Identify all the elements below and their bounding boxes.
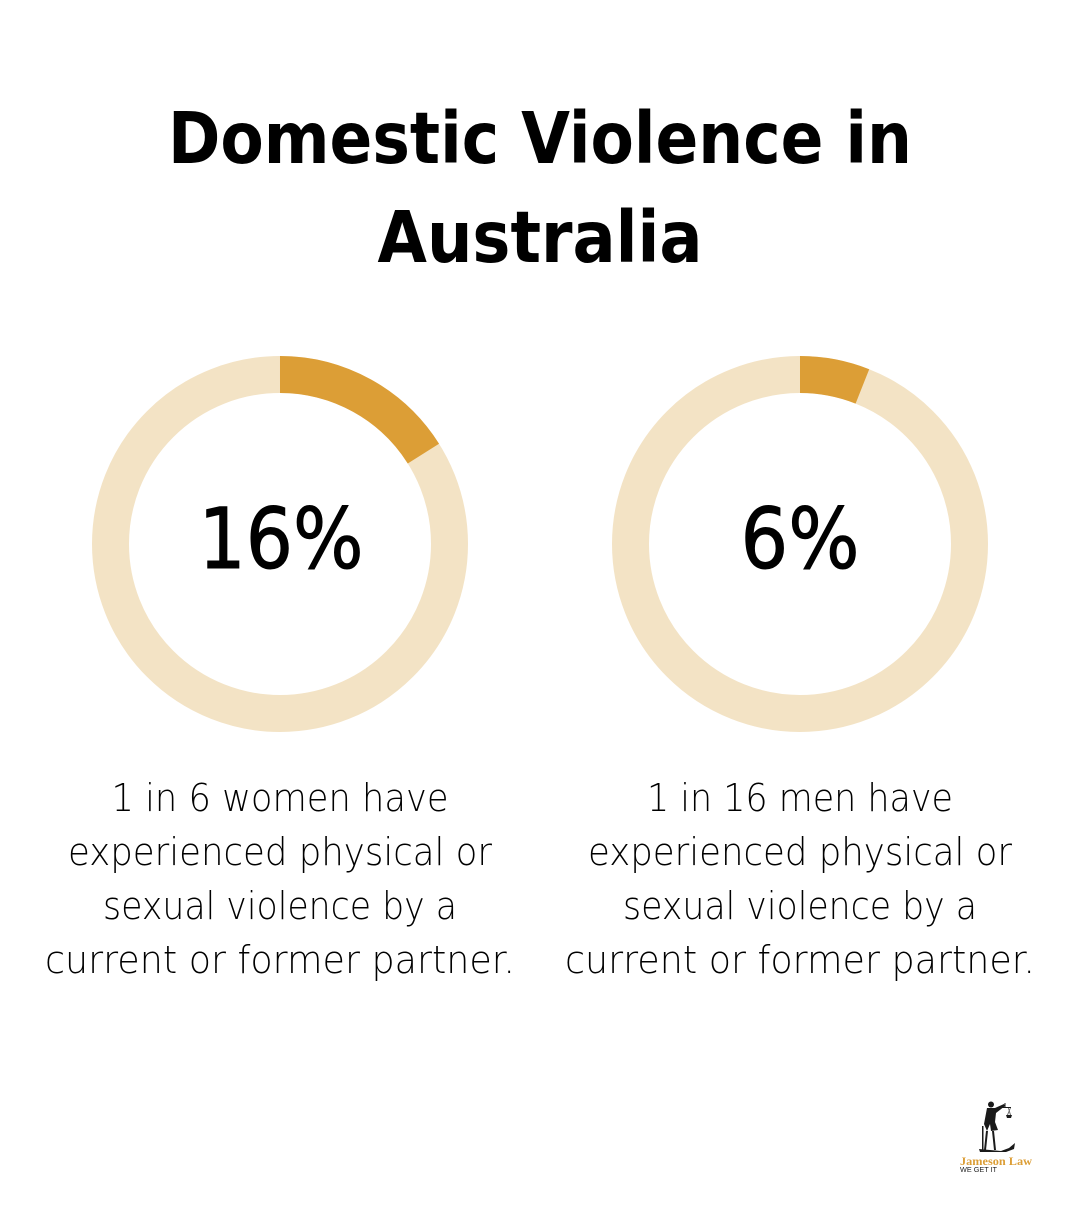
text block: women description: current or former partner. xyxy=(45,938,515,982)
text block: women description: experienced physical or xyxy=(68,830,492,874)
panel: men statistic xyxy=(565,374,1035,982)
logo tagline: WE GET IT xyxy=(960,1167,998,1174)
title: Australia xyxy=(378,196,702,279)
text block: women description: sexual violence by a xyxy=(103,884,457,928)
icon: lady justice xyxy=(979,1102,1015,1152)
text block: men description: experienced physical or xyxy=(588,830,1012,874)
title: Domestic Violence in xyxy=(168,97,912,180)
logo name: Jameson Law xyxy=(960,1156,1033,1168)
title xyxy=(168,97,912,279)
panel: women statistic xyxy=(45,374,515,982)
donut chart: 6%: 6% xyxy=(740,490,860,588)
text block: women description xyxy=(45,776,515,982)
text block: men description: current or former partner. xyxy=(565,938,1035,982)
text block: men description: sexual violence by a xyxy=(623,884,977,928)
donut chart: 16%: 16% xyxy=(198,490,364,588)
text block: men description: 1 in 16 men have xyxy=(647,776,953,820)
donut chart: 16% xyxy=(110,374,450,714)
donut chart: 6% xyxy=(630,374,970,714)
text block: women description: 1 in 6 women have xyxy=(112,776,448,820)
text block: men description xyxy=(565,776,1035,982)
logo: Jameson Law xyxy=(960,1102,1033,1174)
